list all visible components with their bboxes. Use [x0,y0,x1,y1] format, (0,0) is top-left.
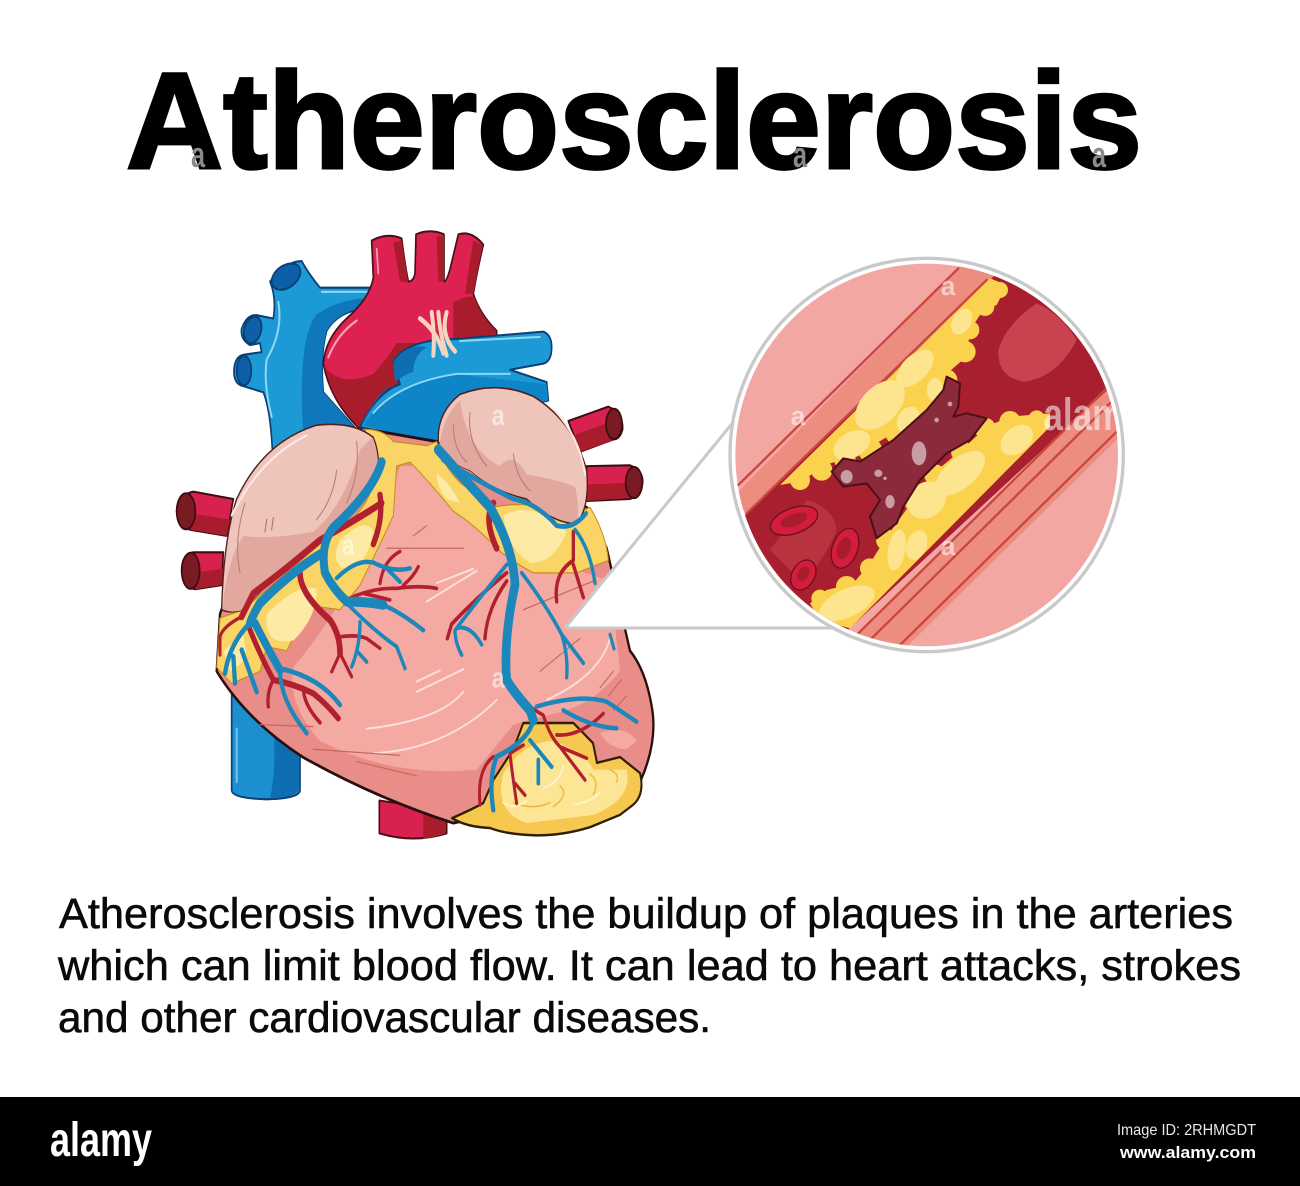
watermark letters on heart: a [342,528,355,561]
ruptured clot [832,377,987,538]
inferior vena cava [232,679,300,799]
artery cross-section [735,264,1118,646]
outer tissue [735,264,1118,646]
lens ring [730,258,1123,652]
left auricle [222,424,378,612]
heart illustration [177,231,653,839]
descending aorta [379,801,447,839]
website: www.alamy.com [1119,1143,1256,1162]
alamy logo: alamy [50,1114,152,1167]
title: Atherosclerosis [126,45,1142,198]
lower fat deposit [452,723,641,835]
coronary veins [225,450,637,810]
watermark: a [941,531,956,561]
upper wall band [733,263,1020,523]
watermark letters on heart: a [492,661,505,694]
lower wall band [857,390,1118,646]
ventricles [217,429,653,823]
upper plaque [780,278,1008,490]
upper plaque highlights [828,305,977,466]
title: a [1092,134,1107,175]
title: a [191,134,206,175]
aortic arch [323,231,497,429]
lumen [745,276,1107,630]
description text [57,890,1241,1042]
lower plaque highlights [814,419,1039,629]
callout pointer [565,420,845,628]
red blood cell 2 [830,528,860,569]
watermark [791,271,1123,561]
clot spots [841,402,952,508]
title: a [793,134,808,175]
wall lines [738,268,1120,645]
description text: and other cardiovascular diseases. [58,994,711,1042]
pulmonary artery [360,332,552,446]
description text: which can limit blood flow. It can lead to heart attacks, strokes [57,942,1241,990]
watermark: a [791,401,806,431]
footer bar [0,1097,1300,1186]
watermark: alam [1043,389,1123,440]
lower plaque [810,410,1050,628]
watermark letters on heart: a [492,399,505,432]
image id: Image ID: 2RHMGDT [1117,1122,1256,1139]
white lens backing [729,258,1124,652]
coronary arteries [220,495,603,805]
upper fat deposits [217,429,608,684]
red blood cell 3 [790,559,817,591]
description text: Atherosclerosis involves the buildup of plaques in the arteries [59,890,1233,938]
right auricle [438,388,587,524]
magnified artery lens [728,256,1125,654]
pale highlight [998,303,1077,382]
pulmonary veins [177,407,643,589]
superior vena cava [234,258,373,491]
ligament [420,312,455,355]
watermark letters on heart [342,399,505,694]
watermark: a [941,271,956,301]
red blood cell 1 [770,505,818,536]
